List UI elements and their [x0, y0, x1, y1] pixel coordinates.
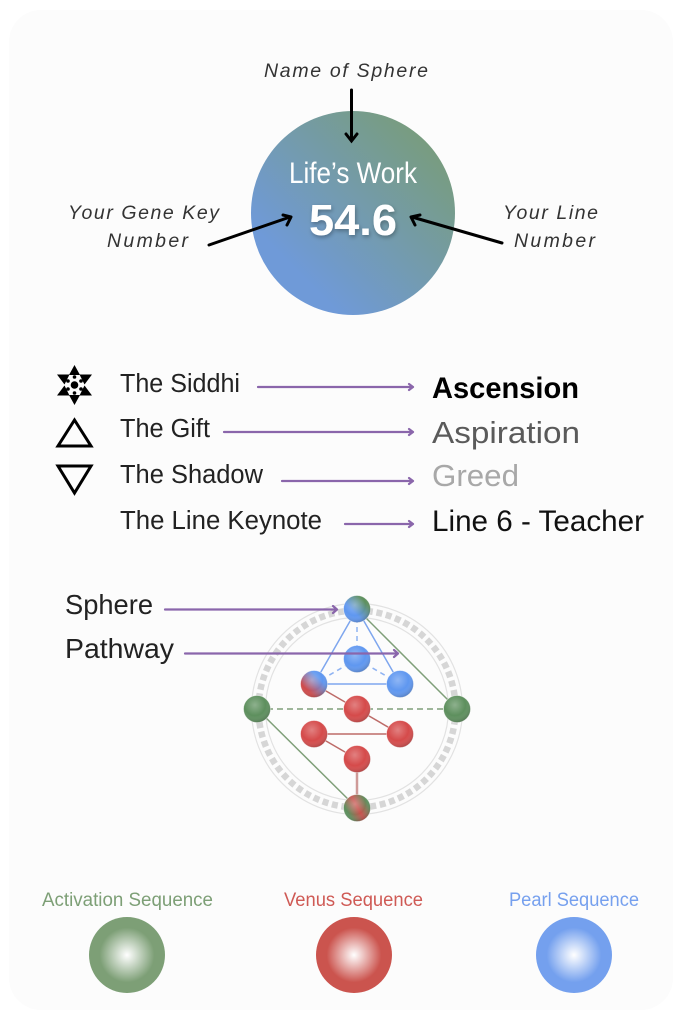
row labels	[120, 370, 322, 535]
label: Your Line Number	[503, 202, 598, 252]
row values: Greed	[432, 458, 519, 493]
pathways	[257, 609, 457, 808]
row values: Aspiration	[432, 415, 580, 450]
row arrows	[224, 384, 413, 527]
arrow: to line number	[411, 215, 502, 243]
arrow: to sphere name	[346, 90, 357, 141]
legend: Pearl Sequence: Pearl Sequence	[509, 890, 639, 911]
row labels: The Gift	[120, 415, 210, 443]
mandala ring	[252, 604, 462, 814]
label: Name of Sphere: Name of Sphere	[264, 60, 428, 82]
spheres	[244, 596, 470, 822]
sphere diagram: Life's Work	[251, 111, 455, 315]
arrow: to gene key number	[209, 215, 291, 245]
label: Your Gene Key Number: Your Gene Key	[68, 202, 220, 224]
icon: gift triangle	[58, 420, 91, 446]
gene key number: 54.6	[309, 196, 397, 245]
label: Pathway: Pathway	[65, 633, 174, 664]
row values	[432, 372, 644, 538]
sphere highlights	[244, 596, 470, 822]
sphere name: Life’s Work	[289, 157, 418, 190]
row labels: The Shadow	[120, 461, 264, 489]
legend: Venus Sequence: Venus Sequence	[284, 890, 423, 911]
icon: shadow triangle	[58, 466, 91, 493]
arrow: sphere pointer	[165, 606, 337, 613]
legend: Pearl Sequence	[509, 890, 639, 993]
label: Your Line Number: Number	[514, 230, 596, 252]
legend: Activation Sequence: Activation Sequence	[42, 890, 213, 911]
icon: siddhi star	[57, 365, 92, 405]
label: Your Line Number: Your Line	[503, 202, 598, 224]
label: Sphere: Sphere	[65, 589, 153, 620]
label: Your Gene Key Number	[68, 202, 220, 252]
legend: Venus Sequence	[284, 890, 423, 993]
arrow: pathway pointer	[185, 650, 398, 657]
main gradient circle	[251, 111, 455, 315]
row values: Line 6 - Teacher	[432, 505, 644, 538]
row labels: The Line Keynote	[120, 507, 322, 535]
legend: Activation Sequence	[42, 890, 213, 993]
row values: Ascension	[432, 372, 579, 405]
label: Your Gene Key Number: Number	[107, 230, 190, 252]
row labels: The Siddhi	[120, 370, 240, 398]
chart: gene keys spheres	[244, 596, 470, 822]
